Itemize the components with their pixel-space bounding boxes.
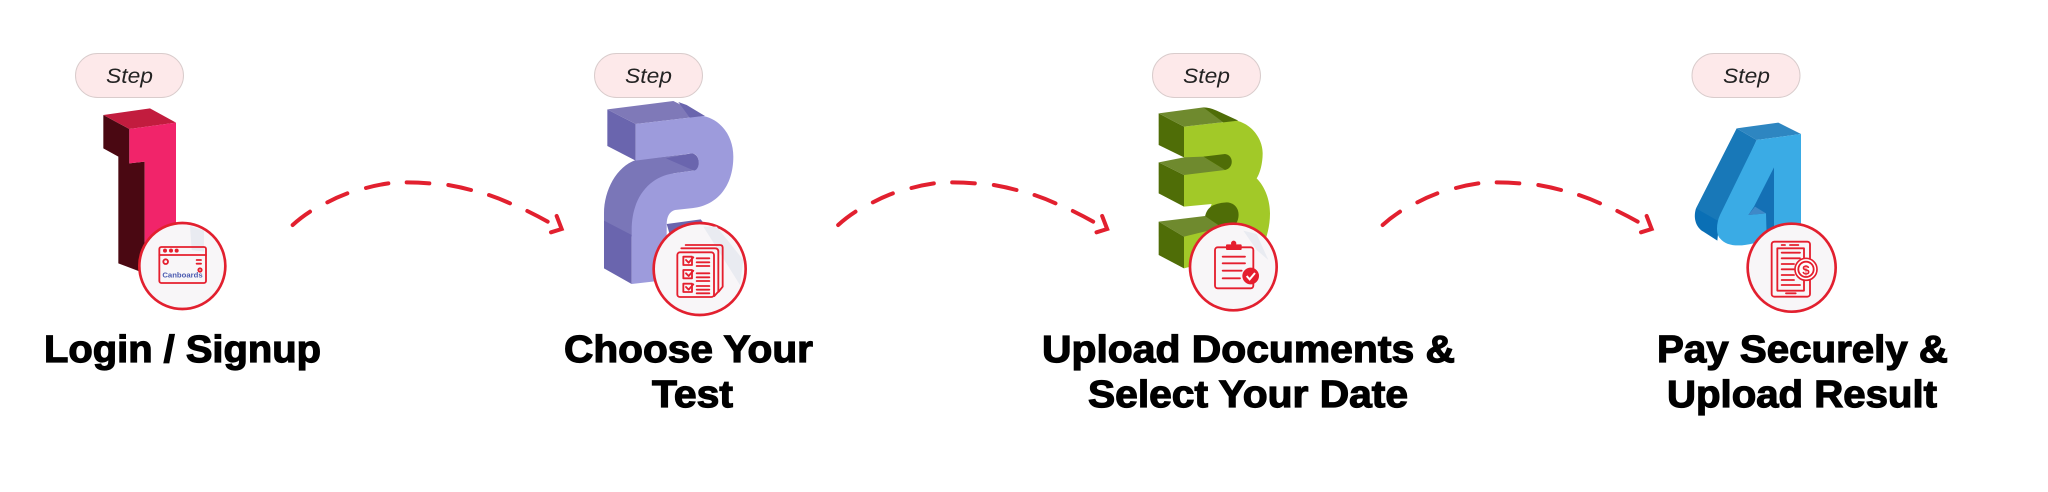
icon: payment tablet — [1748, 224, 1836, 312]
title: choose your test: Test — [652, 374, 733, 416]
title: choose your test: Choose Your — [564, 329, 813, 371]
icon: login browser window: Canboards — [162, 272, 203, 279]
icon: login browser window — [139, 223, 225, 309]
title: login: Login / Signup — [44, 329, 321, 371]
step pill 2: Step — [625, 65, 672, 88]
numeral 1 — [103, 108, 176, 273]
panel: step 1 — [44, 54, 321, 371]
title: pay securely: Upload Result — [1667, 374, 1937, 416]
arrow 2 to 3 — [838, 182, 1107, 232]
numeral 4 — [1695, 123, 1801, 245]
icon: test papers — [654, 223, 746, 315]
title: pay securely: Pay Securely & — [1657, 329, 1948, 371]
title: upload documents — [1042, 329, 1455, 416]
panel: step 3 — [1042, 54, 1455, 416]
title: choose your test — [564, 329, 813, 416]
step pill 1 — [76, 54, 184, 98]
step pill 4: Step — [1723, 65, 1770, 88]
step pill 2 — [594, 54, 702, 98]
panel: step 2 — [564, 54, 813, 416]
arrow 1 to 2 — [293, 182, 562, 232]
numeral 3 — [1159, 107, 1270, 268]
title: upload documents: Upload Documents & — [1042, 329, 1455, 371]
panel: step 4 — [1657, 54, 1948, 416]
numeral 2 — [604, 101, 733, 284]
step pill 3: Step — [1183, 65, 1230, 88]
step pill 3 — [1152, 54, 1260, 98]
title: pay securely — [1657, 329, 1948, 416]
icon: clipboard check — [1190, 224, 1277, 310]
title: upload documents: Select Your Date — [1088, 374, 1408, 416]
icon: payment tablet: $ — [1802, 262, 1810, 277]
step pill 1: Step — [106, 65, 153, 88]
arrow 3 to 4 — [1383, 182, 1652, 232]
step pill 4 — [1692, 54, 1800, 98]
